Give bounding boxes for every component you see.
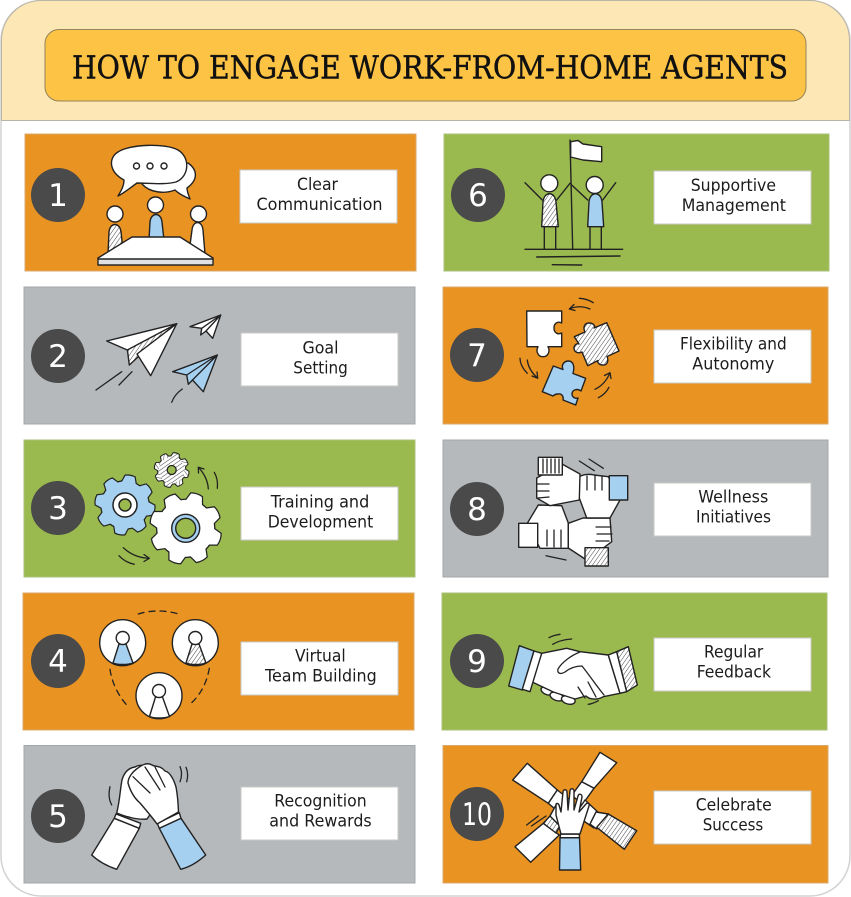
label <box>241 487 398 540</box>
number 3 <box>31 481 85 535</box>
label: Regular <box>704 642 763 662</box>
label <box>654 171 811 224</box>
label: Celebrate <box>696 795 772 815</box>
label: Setting <box>293 357 348 377</box>
number 3: 3 <box>48 491 68 527</box>
icon: puzzle pieces <box>520 298 619 405</box>
number 2 <box>31 329 85 383</box>
title bar <box>45 30 806 101</box>
number 8: 8 <box>467 492 487 528</box>
label <box>654 330 811 383</box>
number 10 <box>450 787 504 841</box>
label: Flexibility and <box>680 333 787 353</box>
label: Virtual <box>295 646 346 666</box>
panel 9: regular feedback <box>442 593 827 730</box>
number 6: 6 <box>468 178 488 214</box>
label: Training and <box>270 491 369 511</box>
number 9: 9 <box>467 644 487 680</box>
label <box>654 638 811 691</box>
icon: handshake <box>509 634 637 706</box>
icon: interlocked hands <box>519 457 628 566</box>
panel 2: goal setting <box>24 287 415 424</box>
icon: paper planes <box>96 315 221 402</box>
label: Initiatives <box>696 507 771 527</box>
label: Supportive <box>691 175 776 195</box>
number 4: 4 <box>48 644 68 680</box>
label <box>241 333 398 386</box>
label: Goal <box>302 337 338 357</box>
number 10: 10 <box>462 797 492 833</box>
label: Management <box>682 195 786 215</box>
panel 10: celebrate success <box>443 746 828 883</box>
panel 7: flexibility and autonomy <box>443 287 828 424</box>
number 5 <box>31 789 85 843</box>
label: Development <box>268 511 374 531</box>
label: Success <box>703 815 763 835</box>
panel 8: wellness initiatives <box>443 440 828 577</box>
panel 6: supportive management <box>444 134 829 271</box>
label: Feedback <box>697 662 771 682</box>
icon: high five <box>92 764 206 869</box>
number 9 <box>450 634 504 688</box>
icon: meeting <box>98 145 213 265</box>
label <box>654 483 811 536</box>
icon: virtual team <box>100 611 218 719</box>
panel 3: training and development <box>24 440 415 577</box>
icon: gears <box>91 449 231 573</box>
label: Autonomy <box>692 353 774 373</box>
number 8 <box>450 482 504 536</box>
number 4 <box>31 634 85 688</box>
label: and Rewards <box>269 811 372 831</box>
label <box>241 787 398 840</box>
label: Team Building <box>264 666 377 686</box>
number 1: 1 <box>48 178 68 214</box>
label <box>240 170 397 223</box>
label <box>654 791 811 844</box>
icon: stacked hands <box>513 752 637 870</box>
number 1 <box>31 168 85 222</box>
header band <box>2 0 850 120</box>
label: Communication <box>256 194 382 214</box>
label: Wellness <box>698 487 768 507</box>
icon: flag and two people <box>525 140 623 265</box>
panel 4: virtual team building <box>23 593 414 730</box>
number 6 <box>451 168 505 222</box>
label <box>241 642 398 695</box>
number 2: 2 <box>48 339 68 375</box>
panel 5: recognition and rewards <box>24 746 415 883</box>
label: Clear <box>297 174 338 194</box>
number 7 <box>450 328 504 382</box>
number 7: 7 <box>467 338 487 374</box>
panel 1: clear communication <box>25 134 416 271</box>
number 5: 5 <box>48 799 68 835</box>
label: Recognition <box>274 791 367 811</box>
